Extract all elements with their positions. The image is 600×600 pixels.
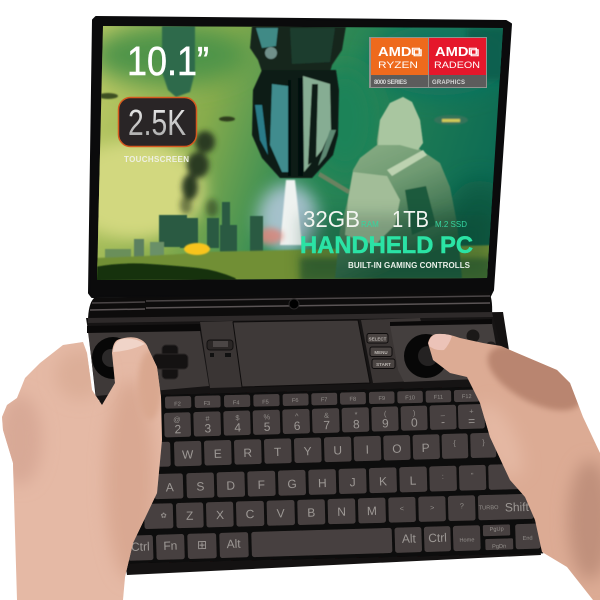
home key row: G (287, 477, 297, 491)
QWERTY key row: R (243, 446, 253, 460)
number key row: ^ (295, 412, 299, 421)
bottom key row: Alt (402, 532, 417, 546)
memory and storage specs: 1TB (392, 206, 429, 232)
number key row: * (355, 410, 358, 419)
keyboard keys (127, 387, 543, 563)
number key row: ) (413, 408, 415, 417)
ground and trees (97, 244, 489, 280)
number key row: & (324, 411, 329, 420)
memory and storage specs: RAM (361, 220, 379, 229)
function key row: F10 (405, 395, 415, 402)
function key row: F7 (321, 397, 328, 403)
background ship (162, 26, 195, 97)
QWERTY key row: I (365, 443, 369, 457)
lower letter key row: N (337, 505, 346, 519)
bottom key row: PgDn (492, 544, 506, 550)
QWERTY key row (157, 432, 497, 467)
lower letter key row: X (216, 508, 224, 522)
number key row: 6 (294, 419, 301, 433)
lower letter key row (143, 493, 535, 530)
start button (372, 359, 395, 368)
lower letter key row: ✿ (160, 511, 167, 520)
function key row: F4 (233, 400, 240, 406)
screen artwork (97, 26, 503, 280)
select button: SELECT (369, 336, 387, 342)
function key row: F8 (349, 397, 356, 403)
spaceship (250, 26, 346, 178)
function key row: F9 (378, 396, 385, 402)
hinge (88, 292, 492, 322)
lower letter key row: ? (460, 501, 464, 510)
AMD badges (369, 37, 487, 88)
function key row: F2 (174, 402, 181, 408)
gaming controls subheading: BUILT-IN GAMING CONTROLLS (348, 261, 471, 270)
number key row: + (469, 407, 474, 416)
number key row: 4 (234, 420, 242, 435)
number key row: 0 (411, 416, 418, 430)
QWERTY key row: U (333, 443, 342, 458)
memory and storage specs (303, 206, 467, 232)
lower letter key row: > (430, 503, 434, 512)
upper control deck (87, 314, 510, 400)
bottom key row: Ctrl (428, 531, 447, 545)
QWERTY key row: P (421, 441, 430, 455)
flying saucers (98, 93, 468, 125)
home key row: A (166, 480, 174, 495)
QWERTY key row: { (453, 438, 456, 448)
number key row: ( (384, 409, 387, 418)
number key row: - (441, 415, 445, 429)
lower letter key row: Z (186, 509, 194, 523)
right thumbnail (428, 334, 452, 350)
lower letter key row: C (245, 507, 255, 521)
home key row: J (349, 475, 356, 489)
explosion (184, 243, 210, 255)
home key row: L (409, 474, 417, 488)
select button (367, 334, 388, 343)
bottom key row: Ctrl (131, 539, 150, 554)
right analog stick (404, 334, 448, 378)
left hand (0, 330, 170, 600)
QWERTY key row: O (392, 442, 402, 456)
number key row: = (468, 414, 475, 428)
memory and storage specs: M.2 SSD (435, 220, 467, 229)
handheld PC headline: HANDHELD PC (300, 232, 473, 259)
power and mode switch (207, 340, 233, 357)
AMD Ryzen badge: AMD⧉ (378, 44, 423, 59)
lower letter key row: TURBO (479, 505, 499, 512)
number key row: 5 (264, 420, 271, 434)
Y button (466, 330, 480, 342)
QWERTY key row: E (214, 447, 222, 461)
AMD Ryzen badge: 8000 SERIES (374, 80, 407, 86)
home key row: K (379, 474, 387, 489)
home key row (153, 463, 522, 500)
number key row: 8 (353, 417, 360, 431)
QWERTY key row: Y (303, 444, 312, 458)
number key row: _ (440, 407, 446, 417)
bottom key row: Home (459, 537, 475, 544)
A button (486, 342, 496, 352)
menu button: MENU (374, 350, 388, 355)
QWERTY key row: T (274, 445, 282, 459)
number key row (163, 403, 486, 438)
lower letter key row: M (367, 504, 377, 518)
centre panel (200, 321, 243, 388)
AMD Radeon badge: RADEON (434, 60, 480, 70)
number key row: 2 (174, 422, 182, 436)
function key row (164, 389, 480, 409)
bottom key row: PgUp (490, 527, 504, 533)
left thumbnail (113, 339, 145, 352)
QWERTY key row: W (182, 447, 194, 462)
AMD Ryzen badge: RYZEN (378, 60, 418, 70)
function key row: F3 (203, 401, 210, 407)
beam glow (258, 184, 318, 252)
AMD Radeon badge (429, 38, 486, 87)
menu button (370, 347, 392, 356)
lower letter key row: V (276, 506, 285, 521)
start button: START (376, 362, 391, 367)
number key row: @ (173, 415, 181, 424)
keyboard base (86, 292, 543, 575)
AMD Ryzen badge (371, 38, 428, 87)
number key row: % (263, 412, 271, 422)
QWERTY key row: } (482, 438, 485, 447)
2.5K badge (118, 98, 196, 146)
smoke column (180, 131, 218, 217)
bottom key row: Fn (163, 539, 178, 553)
function key row: F6 (292, 398, 299, 404)
memory and storage specs: 32GB (303, 206, 360, 232)
screen size heading: 10.1” (127, 38, 209, 84)
number key row: 9 (382, 416, 389, 431)
home key row: S (196, 479, 205, 494)
function key row: F5 (262, 400, 269, 406)
city skyline (105, 202, 263, 262)
bottom key row: Alt (226, 537, 242, 551)
laptop lid (65, 17, 520, 300)
home key row: F (258, 478, 265, 492)
home key row: " (471, 471, 474, 480)
directional pad (153, 345, 188, 379)
home key row: D (226, 479, 236, 493)
home key row: : (442, 472, 444, 481)
number key row: $ (235, 413, 240, 422)
touchpad (233, 320, 370, 387)
lower letter key row: < (400, 504, 404, 513)
function key row: F11 (434, 395, 443, 401)
lower letter key row: Shift (505, 500, 530, 515)
right hand (425, 330, 600, 600)
function key row: F12 (462, 394, 472, 400)
AMD Radeon badge: GRAPHICS (432, 80, 465, 86)
2.5K badge: 2.5K (128, 102, 186, 143)
bottom key row: ⊞ (197, 538, 207, 552)
hooded figure (318, 97, 462, 278)
left gamepad panel (88, 331, 209, 396)
number key row: 3 (204, 421, 212, 436)
menu panel (361, 318, 438, 383)
bottom key row: End (522, 536, 533, 542)
touchscreen label: TOUCHSCREEN (124, 155, 189, 164)
left analog stick (92, 337, 134, 379)
lower letter key row: B (307, 506, 315, 520)
bottom key row (127, 523, 541, 561)
number key row: # (205, 414, 211, 423)
number key row: 7 (323, 418, 331, 432)
home key row: H (318, 476, 327, 490)
right gamepad panel (390, 323, 502, 382)
AMD Radeon badge: AMD⧉ (435, 44, 480, 59)
